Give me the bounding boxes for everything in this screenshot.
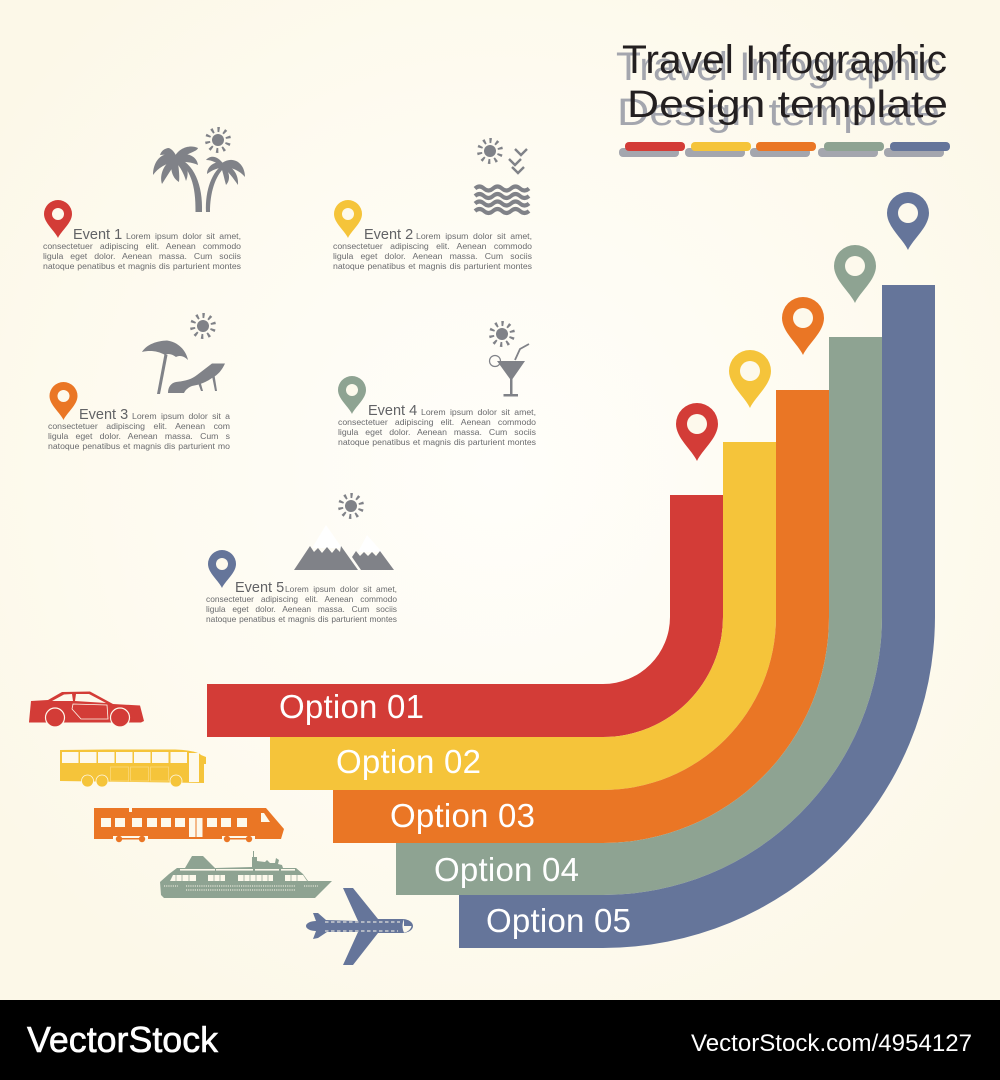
icon: location pin blue xyxy=(208,550,236,588)
title: Design template xyxy=(617,92,940,134)
event 4 body text xyxy=(338,407,536,449)
event 4 body text: consectetuer adipiscing elit. Aenean commodo xyxy=(338,417,536,427)
panel: event 4 xyxy=(338,323,536,449)
icon: sun and cocktail xyxy=(490,323,529,396)
band: option 02 xyxy=(270,442,776,790)
event 4 label: Event 4 xyxy=(368,403,417,419)
footer bar xyxy=(0,1000,1000,1080)
icon: location pin green xyxy=(338,376,366,414)
icon: location pin red xyxy=(44,200,72,238)
event 2 body text: natoque penatibus et magnis dis parturient montes xyxy=(333,261,532,271)
pin: green band xyxy=(834,245,876,303)
band: option 01 xyxy=(207,495,723,737)
title colour bars xyxy=(619,142,950,157)
panel: event 1 xyxy=(43,129,245,273)
icon: sun, birds and waves xyxy=(475,140,529,213)
event 1 body text: ligula eget dolor. Aenean massa. Cum sociis xyxy=(43,251,241,261)
event 1 body text xyxy=(43,231,241,273)
icon: sun, umbrella and lounger xyxy=(142,315,225,394)
icon: sun and palm trees xyxy=(153,129,245,212)
event 2 body text: ligula eget dolor. Aenean massa. Cum sociis xyxy=(333,251,532,261)
footer image id: VectorStock.com/4954127 xyxy=(691,1030,972,1057)
panel: event 3 xyxy=(48,315,230,453)
icon: car xyxy=(29,692,144,727)
title xyxy=(616,38,948,134)
event 5 body text: natoque penatibus et magnis dis parturient montes xyxy=(206,614,397,624)
event 2 body text: Lorem ipsum dolor sit amet, xyxy=(416,231,532,241)
event 3 body text: Lorem ipsum dolor sit a xyxy=(132,411,230,421)
band: option 05: Option 05 xyxy=(486,902,631,939)
footer logo: VectorStock xyxy=(27,1019,219,1060)
panel: event 2 xyxy=(333,140,532,273)
event 4 body text: natoque penatibus et magnis dis parturient montes xyxy=(338,437,536,447)
icon: sun and mountains xyxy=(294,495,394,570)
event 5 body text: Lorem ipsum dolor sit amet, xyxy=(285,584,397,594)
event 4 body text: Lorem ipsum dolor sit amet, xyxy=(421,407,536,417)
event 1 body text: consectetuer adipiscing elit. Aenean commodo xyxy=(43,241,241,251)
band: option 04 xyxy=(396,337,882,895)
event 3 body text: natoque penatibus et magnis dis parturient mo xyxy=(48,441,230,451)
event 1 body text: natoque penatibus et magnis dis parturient montes xyxy=(43,261,241,271)
event 2 body text: consectetuer adipiscing elit. Aenean commodo xyxy=(333,241,532,251)
event 4 body text: ligula eget dolor. Aenean massa. Cum sociis xyxy=(338,427,536,437)
pin: yellow band xyxy=(729,350,771,408)
event 1 label: Event 1 xyxy=(73,227,122,243)
event 3 body text xyxy=(48,411,230,453)
band: option 03 xyxy=(333,390,829,843)
band: option 03: Option 03 xyxy=(390,797,535,834)
title: Design template xyxy=(627,84,948,126)
icon: cruise ship xyxy=(160,851,332,898)
panel: event 5 xyxy=(206,495,397,626)
event 3 label: Event 3 xyxy=(79,407,128,423)
icon: bus xyxy=(60,750,206,787)
event 2 label: Event 2 xyxy=(364,227,413,243)
icon: airplane xyxy=(306,888,413,965)
icon: location pin yellow xyxy=(334,200,362,238)
band: option 01: Option 01 xyxy=(279,688,424,725)
event 5 body text: consectetuer adipiscing elit. Aenean commodo xyxy=(206,594,397,604)
icon: location pin orange xyxy=(50,382,78,420)
event 1 body text: Lorem ipsum dolor sit amet, xyxy=(126,231,241,241)
icon: train xyxy=(94,808,284,842)
event 5 body text: ligula eget dolor. Aenean massa. Cum sociis xyxy=(206,604,397,614)
event 3 body text: ligula eget dolor. Aenean massa. Cum s xyxy=(48,431,230,441)
band: option 05 xyxy=(459,285,935,948)
event 3 body text: consectetuer adipiscing elit. Aenean com xyxy=(48,421,230,431)
event 5 body text xyxy=(206,584,397,626)
pin: red band xyxy=(676,403,718,461)
event 5 label: Event 5 xyxy=(235,580,284,596)
event 2 body text xyxy=(333,231,532,273)
pin: blue band xyxy=(887,192,929,250)
band: option 04: Option 04 xyxy=(434,851,579,888)
band: option 02: Option 02 xyxy=(336,743,481,780)
pin: orange band xyxy=(782,297,824,355)
title: Travel Infographic xyxy=(622,38,947,82)
title: Travel Infographic xyxy=(616,45,941,89)
